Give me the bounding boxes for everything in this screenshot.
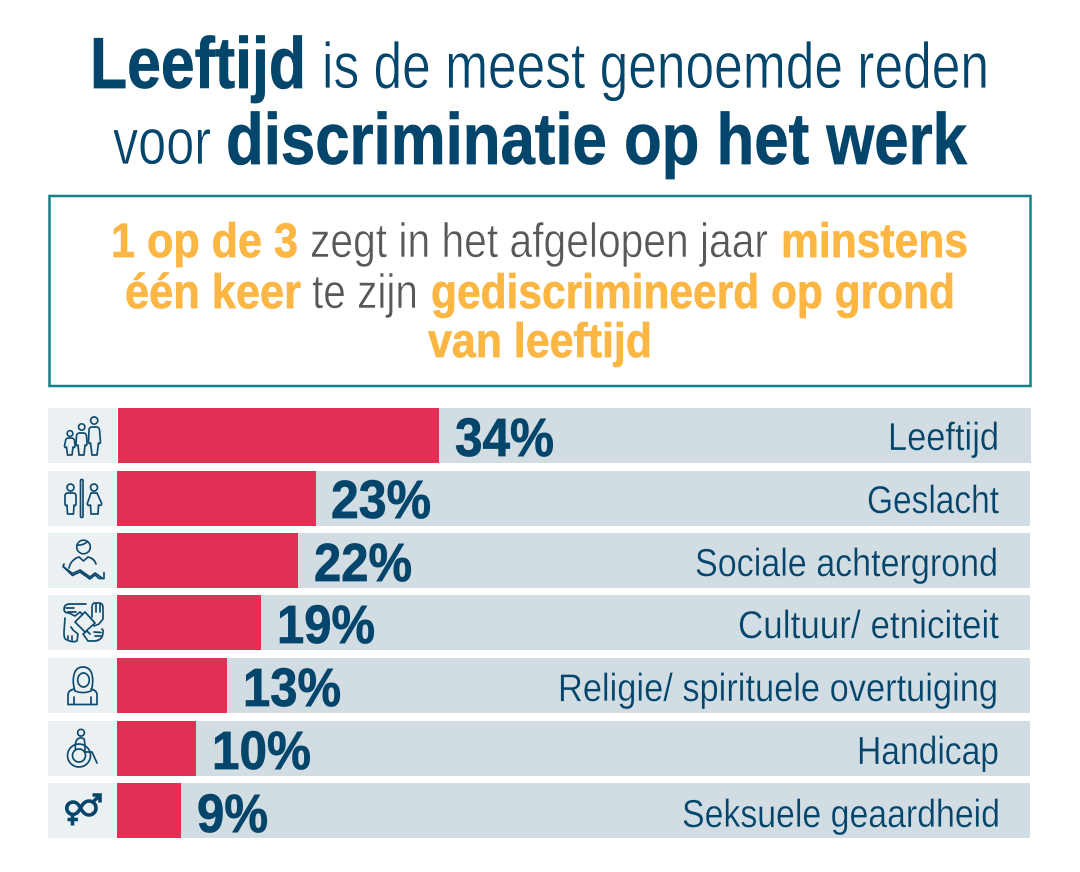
callout box: gediscrimineerd op grond	[431, 266, 955, 319]
icon: woman with headscarf	[68, 667, 97, 704]
row: Religie/ spirituele overtuiging 13%	[48, 658, 1030, 718]
row: Seksuele geaardheid 9%: 9%	[197, 784, 268, 844]
row: Religie/ spirituele overtuiging 13%: 13%	[243, 658, 341, 718]
row: Leeftijd 34%	[48, 408, 1031, 468]
row: Leeftijd 34%: Leeftijd	[888, 416, 999, 459]
callout box: één keer	[125, 266, 301, 319]
row: Sociale achtergrond 22%	[48, 533, 1030, 593]
callout box: van leeftijd	[428, 315, 652, 368]
callout box: 1 op de 3	[111, 215, 298, 268]
row: Handicap 10%: Handicap	[857, 730, 999, 773]
row: Cultuur/ etniciteit 19%: 19%	[277, 595, 375, 655]
icon: three people of increasing height	[64, 417, 100, 455]
row: Leeftijd 34%: 34%	[455, 408, 554, 468]
icon: person with falling arrow	[63, 540, 104, 579]
callout box: te zijn	[312, 266, 418, 319]
title: discriminatie op het werk	[226, 100, 968, 180]
icon: wheelchair user	[68, 729, 97, 767]
icon: four interlocked hands	[64, 603, 103, 642]
row: Sociale achtergrond 22%: 22%	[314, 533, 412, 593]
row: Handicap 10%: 10%	[212, 721, 311, 781]
title	[90, 24, 989, 180]
row: Seksuele geaardheid 9%: Seksuele geaardheid	[682, 793, 1000, 836]
row: Handicap 10%	[48, 721, 1030, 781]
callout box: minstens	[781, 215, 968, 268]
row: Cultuur/ etniciteit 19%	[48, 595, 1030, 655]
title: Leeftijd	[90, 24, 306, 104]
row: Seksuele geaardheid 9%	[48, 783, 1030, 844]
row: Geslacht 23%: Geslacht	[867, 479, 999, 522]
title: voor	[113, 105, 211, 178]
row: Geslacht 23%	[48, 470, 1030, 530]
row: Religie/ spirituele overtuiging 13%: Religie/ spirituele overtuiging	[558, 667, 998, 710]
callout box	[50, 196, 1030, 386]
icon: gender symbols	[67, 795, 100, 826]
icon: man and woman with divider	[65, 480, 102, 518]
row: Sociale achtergrond 22%: Sociale achtergrond	[695, 542, 998, 585]
row: Geslacht 23%: 23%	[331, 470, 431, 530]
callout box: zegt in het afgelopen jaar	[310, 215, 768, 268]
row: Cultuur/ etniciteit 19%: Cultuur/ etniciteit	[738, 604, 999, 647]
